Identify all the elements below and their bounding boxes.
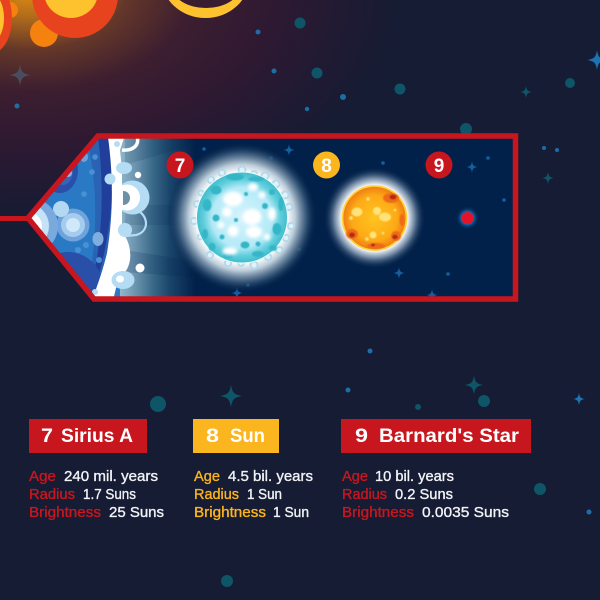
badge 8: 8 [321,156,332,177]
top-left star flare shapes [0,0,250,53]
facts: Sun: 1 Sun [247,487,282,503]
facts: Sirius A: 240 mil. years [64,469,158,485]
facts: Sun: Radius [194,487,239,503]
white bubbling edge [92,138,150,296]
heading: Sirius A: Sirius A [61,426,133,447]
badge 8 [313,152,340,178]
blue stellar surface [32,138,120,296]
heading: Barnard's Star: 9 [355,426,368,447]
heading: Sirius A: 7 [41,426,53,447]
heading: Barnard's Star: Barnard's Star [379,426,520,447]
heading: Barnard's Star [341,419,531,453]
facts: Sun: Age [194,469,220,485]
facts: Sirius A: Radius [29,487,75,503]
facts: Sun: 4.5 bil. years [228,469,313,485]
star: Sun [324,167,426,269]
heading: Sun: 8 [206,426,219,447]
white flare gradient [120,138,189,296]
facts: Barnard's Star: 10 bil. years [375,469,454,485]
connector line [0,216,28,221]
facts: Barnard's Star [342,469,509,521]
heading: Sun: Sun [230,426,265,447]
facts: Barnard's Star: Age [342,469,368,485]
badge 9: 9 [434,156,444,177]
heading: Sirius A [29,419,147,453]
facts: Sirius A: Age [29,469,56,485]
heading: Sun [193,419,279,453]
facts: Sun: Brightness [194,505,266,521]
badge 9 [426,152,452,178]
facts: Barnard's Star: 0.2 Suns [395,487,453,503]
star: Sirius A [167,142,317,292]
facts: Barnard's Star: Radius [342,487,387,503]
badge 7 [166,152,194,178]
badge 7: 7 [175,156,185,177]
facts: Barnard's Star: 0.0035 Suns [422,505,509,521]
panel: zoomed star view [26,133,518,302]
facts: Barnard's Star: Brightness [342,505,414,521]
facts: Sun: 1 Sun [273,505,309,521]
facts: Sirius A [29,469,164,521]
facts: Sun [194,469,313,521]
background stars inside panel [202,144,506,301]
panel border [28,136,516,299]
facts: Sirius A: 25 Suns [109,505,164,521]
facts: Sirius A: 1.7 Suns [83,487,136,503]
star: Barnard's Star [456,206,480,230]
facts: Sirius A: Brightness [29,505,101,521]
